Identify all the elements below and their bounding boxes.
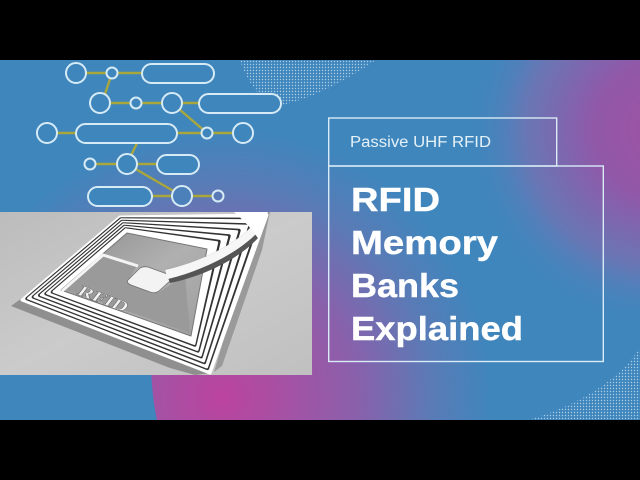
- title box: [329, 166, 603, 362]
- title: Banks: [351, 267, 459, 304]
- tag label: RFID: [74, 282, 133, 315]
- tag coil window: [61, 233, 207, 336]
- connector lines: [57, 73, 233, 196]
- node network diagram: [37, 63, 281, 206]
- title: Explained: [351, 310, 523, 347]
- inner panel: [66, 257, 190, 333]
- subtitle box: [329, 118, 557, 166]
- antenna arm: [165, 228, 258, 283]
- background gradient panel: [0, 60, 640, 420]
- chip pad: [127, 267, 172, 293]
- innermost antenna line: [62, 255, 138, 291]
- dotted wave: bottom right: [528, 348, 640, 420]
- photo: RFID tag: [0, 212, 312, 375]
- subtitle: Passive UHF RFID: [350, 134, 491, 151]
- title: RFID: [351, 181, 440, 218]
- dotted wave: top: [240, 60, 376, 105]
- title: [351, 181, 523, 347]
- nodes and pills: [37, 63, 281, 206]
- tag shadow: [11, 298, 212, 375]
- coil rings: [22, 215, 267, 373]
- title: Memory: [351, 224, 499, 261]
- antenna tip: [234, 212, 268, 238]
